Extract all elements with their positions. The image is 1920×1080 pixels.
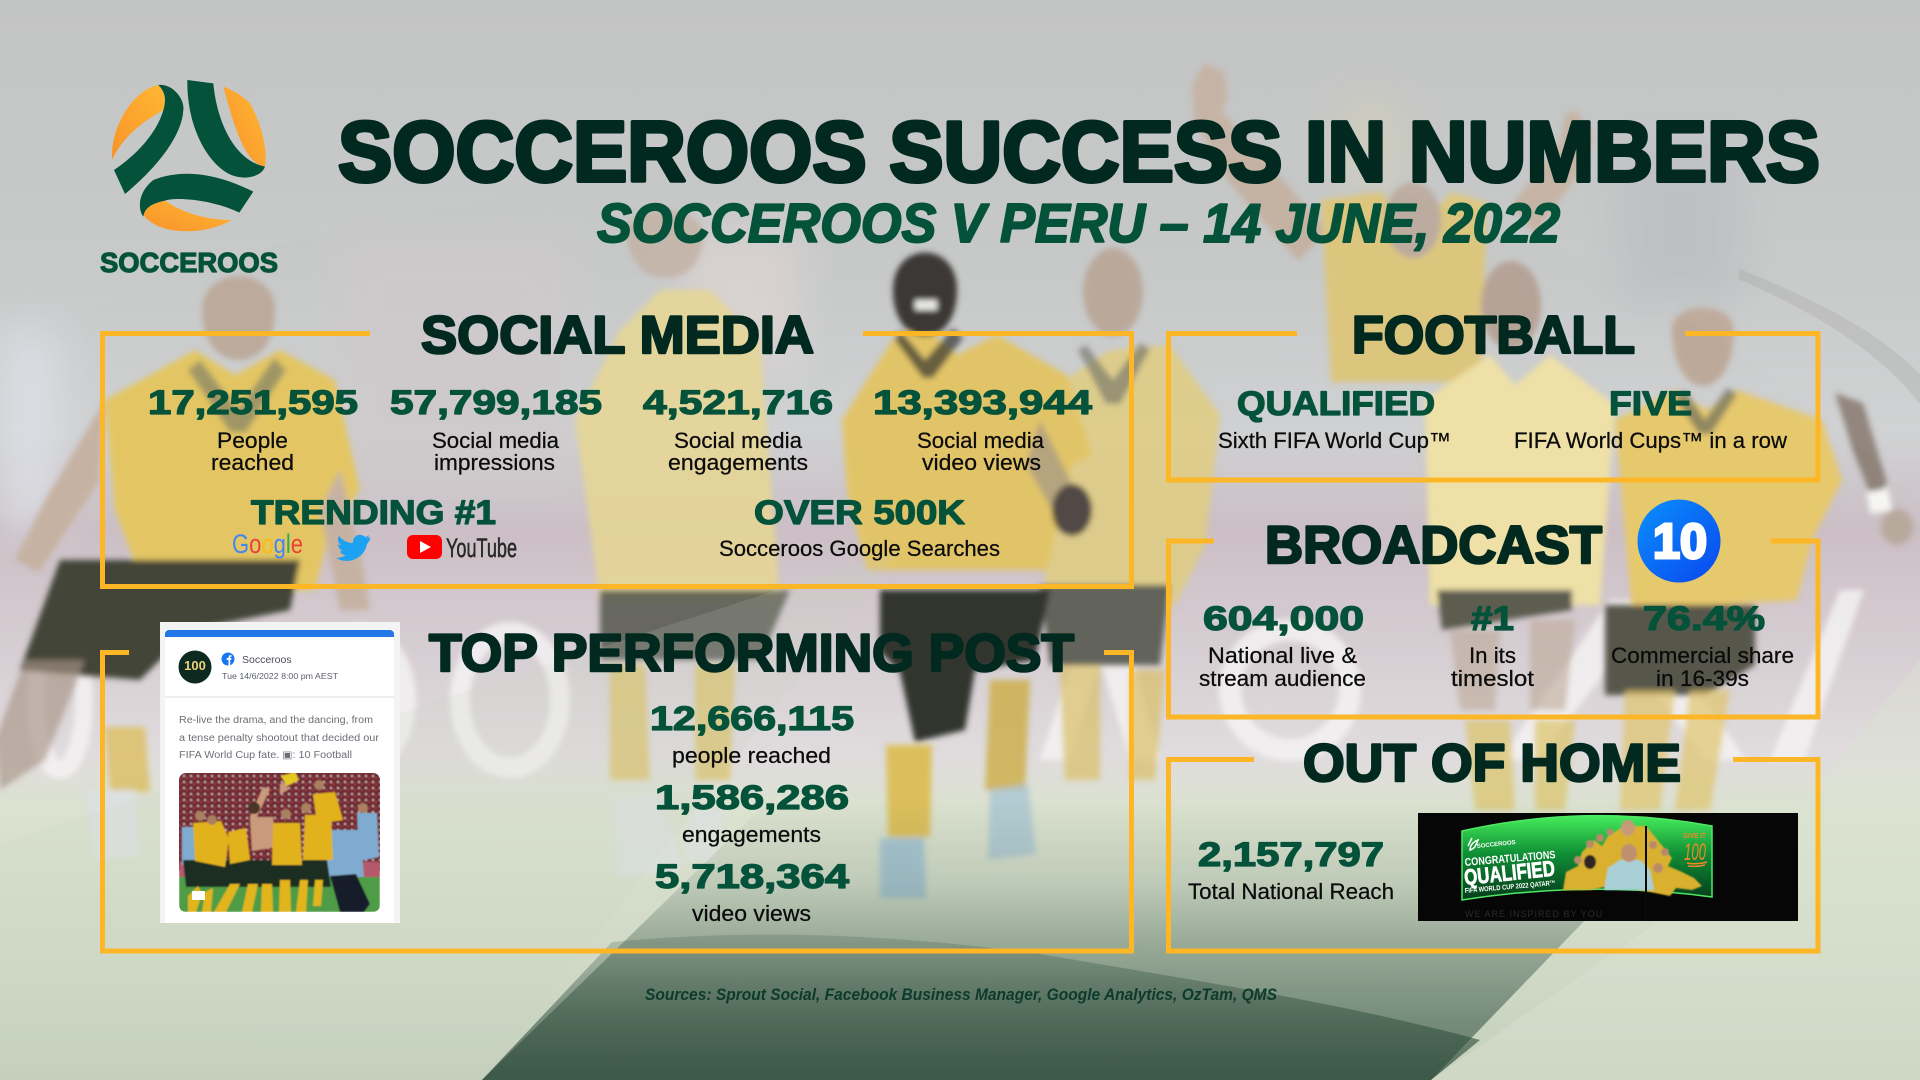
panel: out of home bbox=[1168, 734, 1818, 951]
post author: Socceroos bbox=[242, 654, 292, 666]
stat: impressions: Social media bbox=[432, 428, 560, 453]
heading: social media: SOCIAL MEDIA bbox=[421, 306, 814, 365]
stat: video views: video views bbox=[922, 450, 1041, 475]
post avatar: 100 bbox=[184, 658, 206, 673]
post copy: a tense penalty shootout that decided our bbox=[179, 733, 380, 744]
stat: people reached: reached bbox=[211, 450, 294, 475]
panel: top performing post bbox=[102, 622, 1132, 951]
trending heading: TRENDING #1 bbox=[251, 494, 496, 532]
heading: top performing post: TOP PERFORMING POST bbox=[429, 624, 1074, 683]
post copy: Re-live the drama, and the dancing, from bbox=[179, 715, 373, 726]
stat: impressions: 57,799,185 bbox=[390, 384, 602, 422]
heading: out of home: OUT OF HOME bbox=[1303, 734, 1681, 793]
logo mark bbox=[112, 80, 266, 231]
stat: post reach: people reached bbox=[672, 743, 831, 768]
billboard image: WE ARE INSPIRED BY YOU bbox=[1465, 909, 1603, 919]
stat: engagements bbox=[643, 384, 833, 475]
over 500k stat: Socceroos Google Searches bbox=[719, 536, 1000, 561]
panel: social media bbox=[102, 306, 1132, 586]
icon: youtube bbox=[407, 533, 517, 563]
stat: commercial share: Commercial share bbox=[1611, 643, 1794, 668]
swoosh overlays bbox=[0, 0, 1920, 500]
post card bbox=[160, 622, 400, 923]
back-left player bbox=[575, 290, 780, 600]
stat: commercial share: in 16-39s bbox=[1656, 666, 1749, 691]
centre right player bbox=[1425, 355, 1615, 605]
dark green triangle bbox=[482, 780, 1720, 1080]
logo wordmark: SOCCEROOS bbox=[100, 247, 278, 278]
over 500k stat bbox=[719, 494, 1000, 561]
icon: network 10 logo bbox=[1638, 500, 1720, 582]
title: SOCCEROOS SUCCESS IN NUMBERS bbox=[338, 105, 1820, 200]
stat: five: FIVE bbox=[1609, 385, 1692, 423]
post copy bbox=[179, 715, 380, 761]
raised arm player bbox=[1192, 63, 1593, 261]
stat: post video views: video views bbox=[692, 901, 811, 926]
billboard image bbox=[1418, 813, 1798, 921]
post copy: FIFA World Cup fate. ▣: 10 Football bbox=[179, 750, 352, 761]
stat: timeslot bbox=[1451, 600, 1534, 691]
stat: national reach: 2,157,797 bbox=[1198, 836, 1384, 874]
stat: audience: 604,000 bbox=[1203, 600, 1364, 638]
stat: commercial share: 76.4% bbox=[1643, 600, 1765, 638]
stat: video views: Social media bbox=[917, 428, 1045, 453]
post avatar bbox=[178, 650, 212, 684]
stat: national reach: Total National Reach bbox=[1188, 879, 1394, 904]
stat: post engagements: engagements bbox=[682, 822, 821, 847]
stat: people reached: 17,251,595 bbox=[148, 384, 358, 422]
stat: national reach bbox=[1188, 836, 1394, 904]
billboard image: GIVE IT bbox=[1683, 833, 1707, 840]
stat: qualified bbox=[1218, 385, 1451, 453]
left player bbox=[105, 350, 360, 590]
billboard image: QUALIFIED bbox=[1463, 856, 1556, 890]
centre player in yellow bbox=[842, 325, 1092, 570]
billboard image: CONGRATULATIONS bbox=[1464, 849, 1556, 869]
stat: post reach: 12,666,115 bbox=[650, 700, 854, 738]
far right player bbox=[1615, 390, 1842, 610]
over 500k stat: OVER 500K bbox=[754, 494, 965, 532]
icon: facebook bbox=[222, 652, 234, 666]
icon: youtube: YouTube bbox=[446, 533, 517, 563]
stat: audience: National live & bbox=[1208, 643, 1357, 668]
panel: football bbox=[1168, 306, 1818, 480]
icon: network 10 logo: 10 bbox=[1653, 515, 1707, 569]
heading: football: FOOTBALL bbox=[1352, 306, 1635, 365]
stat: qualified: QUALIFIED bbox=[1237, 385, 1435, 423]
stat: people reached: People bbox=[217, 428, 288, 453]
stat: five: FIFA World Cups™ in a row bbox=[1514, 428, 1787, 453]
sources footnote: Sources: Sprout Social, Facebook Business Manager, Google Analytics, OzTam, QMS bbox=[645, 986, 1277, 1004]
icon: twitter bbox=[336, 535, 370, 561]
stat: people reached bbox=[148, 384, 358, 475]
panel: broadcast bbox=[1168, 500, 1818, 717]
billboard image: 100 bbox=[1684, 839, 1706, 866]
billboard image: SOCCEROOS bbox=[1477, 840, 1516, 850]
stat: post engagements bbox=[655, 779, 849, 847]
post photo bbox=[175, 770, 385, 912]
stat: five bbox=[1514, 385, 1787, 453]
icon: google: Google bbox=[232, 529, 303, 559]
stat: post reach bbox=[650, 700, 854, 768]
stat: post engagements: 1,586,286 bbox=[655, 779, 849, 817]
stat: commercial share bbox=[1611, 600, 1794, 691]
stat: timeslot: In its bbox=[1469, 643, 1516, 668]
logo bbox=[100, 80, 278, 278]
post date: Tue 14/6/2022 8:00 pm AEST bbox=[222, 672, 338, 681]
stat: post video views bbox=[655, 858, 849, 926]
billboard image: FIFA WORLD CUP 2022 QATAR™ bbox=[1465, 880, 1556, 895]
stat: audience bbox=[1199, 600, 1366, 691]
stat: impressions: impressions bbox=[434, 450, 555, 475]
stat: audience: stream audience bbox=[1199, 666, 1366, 691]
stat: impressions bbox=[390, 384, 602, 475]
stat: timeslot: timeslot bbox=[1451, 666, 1534, 691]
stat: video views: 13,393,944 bbox=[873, 384, 1092, 422]
stat: engagements: Social media bbox=[674, 428, 803, 453]
stat: video views bbox=[873, 384, 1092, 475]
stat: engagements: engagements bbox=[668, 450, 808, 475]
stat: qualified: Sixth FIFA World Cup™ bbox=[1218, 428, 1451, 453]
subtitle: SOCCEROOS V PERU – 14 JUNE, 2022 bbox=[597, 192, 1560, 254]
stat: post video views: 5,718,364 bbox=[655, 858, 849, 896]
heading: broadcast: BROADCAST bbox=[1265, 516, 1602, 575]
stat: engagements: 4,521,716 bbox=[643, 384, 833, 422]
stat: timeslot: #1 bbox=[1471, 600, 1514, 638]
player behind centre bbox=[1045, 345, 1220, 605]
